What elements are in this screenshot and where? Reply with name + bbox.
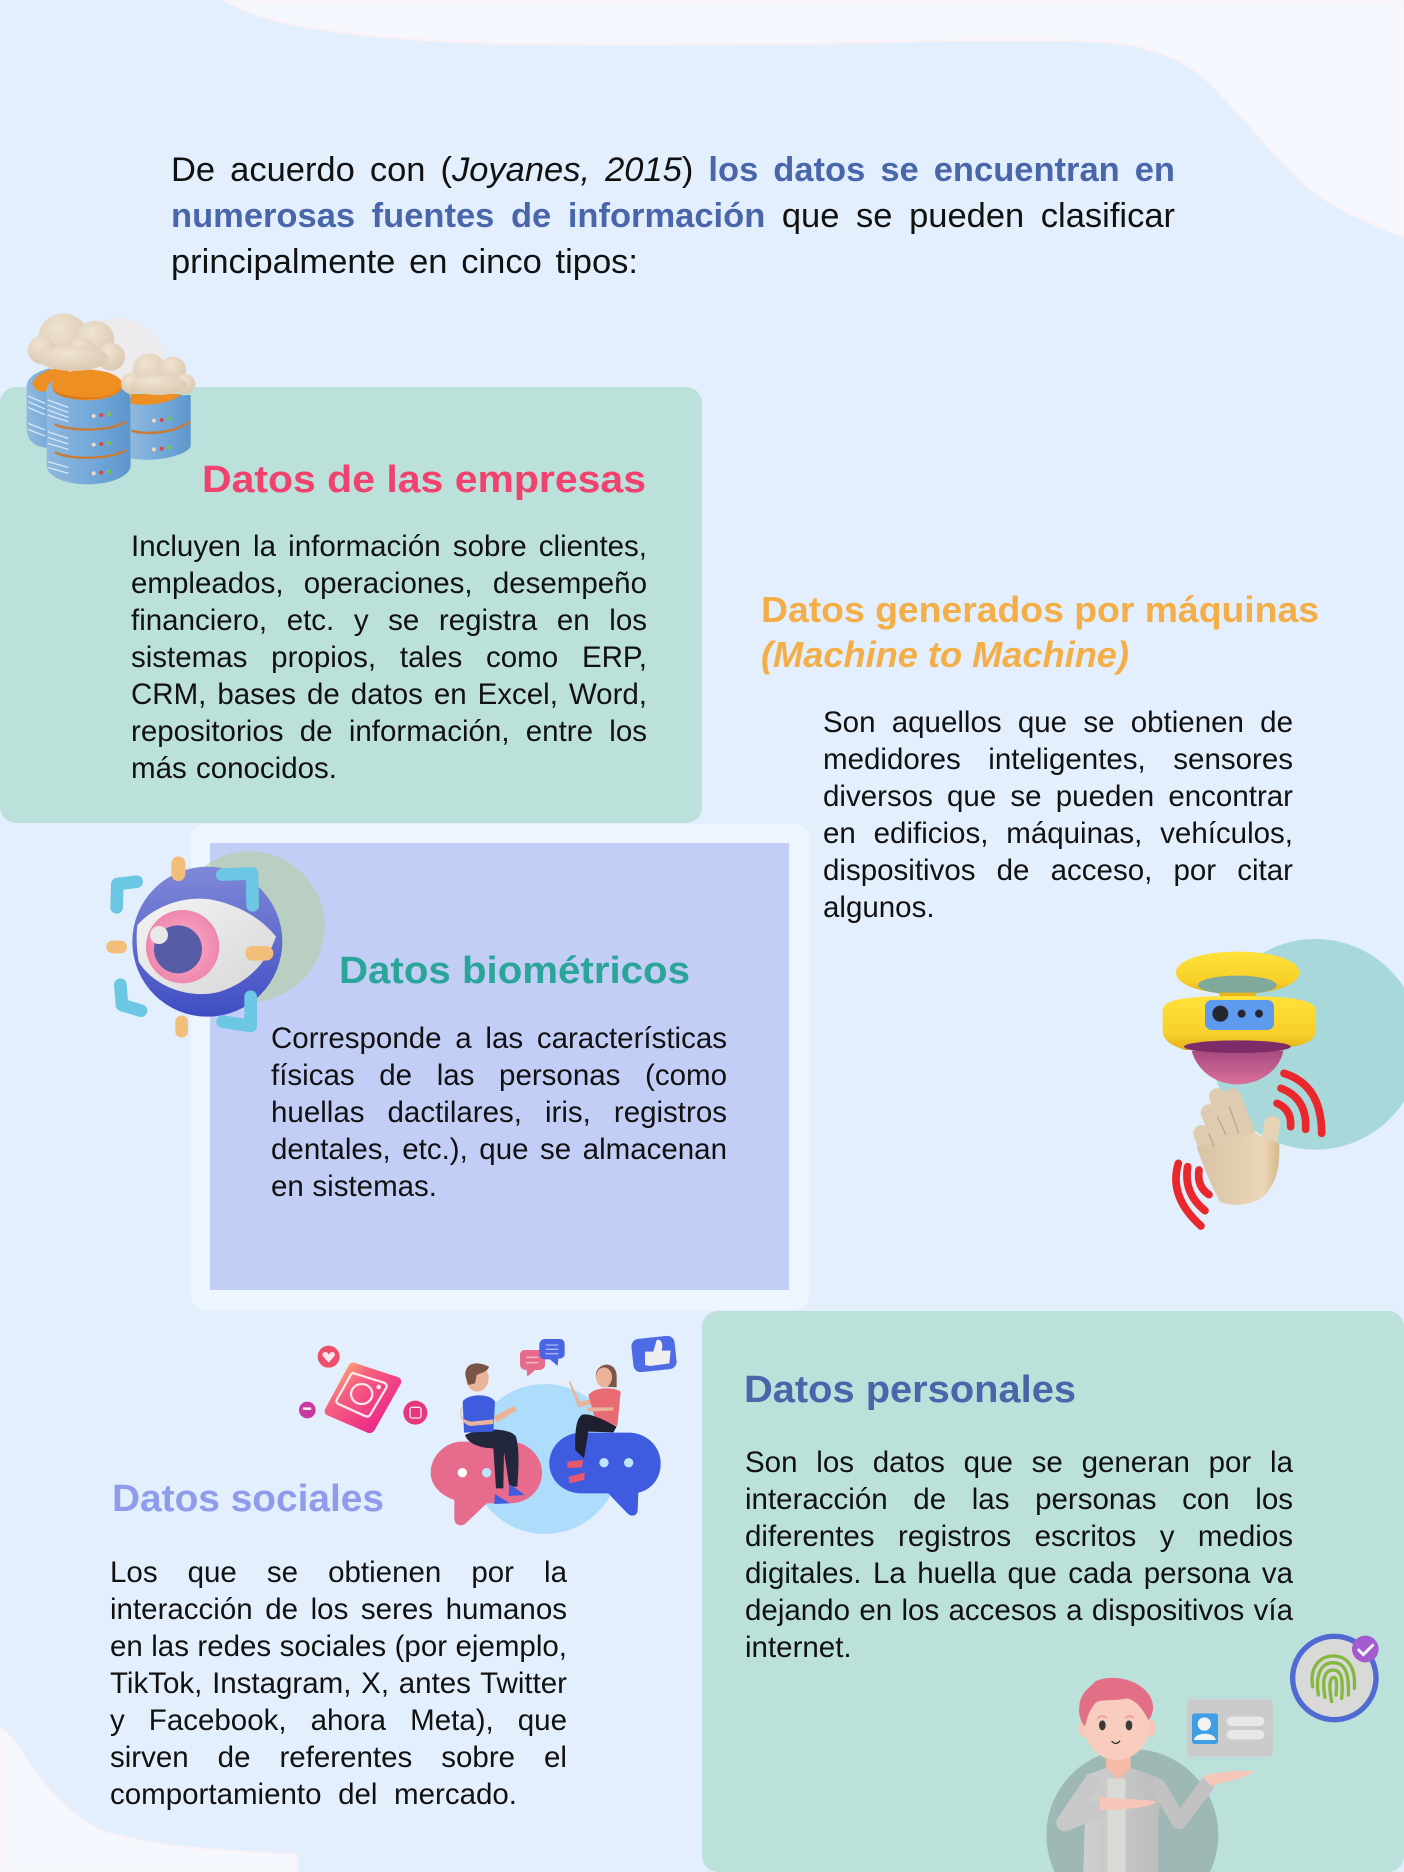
text: datos sociales: y Facebook, ahora Meta), que (110, 1704, 567, 1737)
heading: datos generados por maquinas (761, 589, 1319, 675)
hands (1100, 1797, 1157, 1810)
text: datos sociales: interacción de los seres humanos (110, 1593, 567, 1626)
pink chat bubble (431, 1442, 542, 1525)
text: datos biometricos: huellas dactilares, iris, registros (271, 1096, 727, 1129)
icon: social media people on chat bubbles (299, 1336, 677, 1534)
text: datos generados por maquinas: en edificios, máquinas, vehículos, (823, 817, 1293, 850)
face (1099, 1720, 1106, 1730)
text: datos de las empresas: financiero, etc. y se registra en los (131, 604, 647, 637)
text: datos sociales: comportamiento del mercado. (110, 1778, 517, 1811)
text: datos biometricos: dentales, etc.), que se almacenan (271, 1133, 727, 1166)
heading: datos de las empresas: Datos de las empresas (202, 459, 646, 501)
heading: datos generados por maquinas: Datos generados por máquinas (761, 589, 1319, 630)
coat (1065, 1768, 1207, 1872)
text: datos personales (745, 1446, 1294, 1664)
front stack (47, 370, 131, 484)
panel: datos biometricos inner (210, 843, 789, 1290)
ID card (1187, 1699, 1273, 1757)
panel: datos de las empresas (0, 387, 702, 823)
blue chat bubble (549, 1433, 661, 1516)
sensor top disc (1176, 952, 1299, 994)
woman (567, 1365, 621, 1483)
neck (1106, 1755, 1131, 1779)
small round badges (318, 1346, 340, 1368)
text: datos de las empresas: sistemas propios, tales como ERP, (131, 641, 647, 674)
sensor body (1163, 996, 1316, 1050)
icon: person presenting ID card and fingerprint (1046, 1634, 1379, 1872)
text: datos personales: diferentes registros escritos y medios (745, 1520, 1293, 1553)
sphere (132, 867, 282, 1017)
teal circle (1210, 939, 1404, 1150)
icon: database servers with clouds (26, 313, 196, 484)
text: datos personales: dejando en los accesos a dispositivos vía (745, 1594, 1293, 1627)
hand (1197, 1097, 1279, 1205)
text: datos generados por maquinas: Son aquellos que se obtienen de (823, 706, 1293, 739)
heading: datos sociales: Datos sociales (112, 1478, 384, 1520)
blue circle (470, 1384, 620, 1534)
panel: datos biometricos outer (191, 824, 809, 1310)
tabs (113, 863, 266, 1031)
text: datos biometricos (271, 1022, 727, 1203)
clouds (28, 313, 195, 395)
panel: datos personales (702, 1311, 1404, 1872)
text: datos biometricos: en sistemas. (271, 1170, 437, 1203)
signal waves (1176, 1073, 1322, 1226)
text: datos de las empresas: más conocidos. (131, 752, 337, 785)
intro paragraph: principalmente en cinco tipos: (171, 243, 638, 281)
fingerprint badge (1293, 1636, 1376, 1720)
man (460, 1363, 525, 1504)
text: datos personales: internet. (745, 1631, 852, 1664)
text: datos de las empresas (131, 530, 647, 785)
text: datos generados por maquinas: diversos que se pueden encontrar (823, 780, 1293, 813)
small chat bubbles (520, 1350, 545, 1377)
text: datos biometricos: Corresponde a las características (271, 1022, 727, 1055)
text: datos generados por maquinas: medidores inteligentes, sensores (823, 743, 1293, 776)
brackets (117, 873, 253, 1026)
sensor dome (1192, 1051, 1283, 1084)
icon backing circle: database (68, 318, 164, 380)
intro paragraph: De acuerdo con (Joyanes, 2015) los datos se encuentran en (171, 151, 1175, 189)
back-left stack (27, 367, 78, 448)
heading: datos generados por maquinas: (Machine to Machine) (761, 634, 1129, 675)
text: datos de las empresas: repositorios de información, entre los (131, 715, 647, 748)
text: datos biometricos: físicas de las personas (como (271, 1059, 727, 1092)
text: datos sociales: TikTok, Instagram, X, antes Twitter (110, 1667, 567, 1700)
text: datos de las empresas: CRM, bases de datos en Excel, Word, (131, 678, 647, 711)
intro paragraph (171, 151, 1175, 281)
text: datos personales: Son los datos que se generan por la (745, 1446, 1293, 1479)
text: datos de las empresas: Incluyen la información sobre clientes, (131, 530, 647, 563)
head (1079, 1720, 1089, 1737)
text: datos personales: digitales. La huella que cada persona va (745, 1557, 1293, 1590)
heading: datos personales: Datos personales (744, 1369, 1076, 1411)
text: datos sociales: en las redes sociales (por ejemplo, (110, 1630, 567, 1663)
text: datos generados por maquinas: dispositivos de acceso, por citar (823, 854, 1293, 887)
text: datos generados por maquinas (823, 706, 1293, 924)
intro paragraph: numerosas fuentes de información que se pueden clasificar (171, 197, 1175, 235)
text: datos sociales: sirven de referentes sobre el (110, 1741, 567, 1774)
like badge (631, 1335, 677, 1373)
heading: datos biometricos: Datos biométricos (339, 950, 690, 992)
right stack (131, 394, 191, 460)
instagram tile (325, 1362, 401, 1433)
text: datos sociales (110, 1556, 568, 1811)
text: datos de las empresas: empleados, operaciones, desempeño (131, 567, 647, 600)
icon: eye with scan brackets (106, 851, 325, 1038)
icon: sensor and hand with red signal waves (1162, 939, 1404, 1230)
text: datos personales: interacción de las personas con los (745, 1483, 1293, 1516)
sclera (137, 899, 276, 994)
green circle (174, 851, 325, 1002)
text: datos generados por maquinas: algunos. (823, 891, 935, 924)
text: datos sociales: Los que se obtienen por la (110, 1556, 567, 1589)
grey-teal circle (1046, 1749, 1218, 1872)
hair (1079, 1678, 1153, 1727)
